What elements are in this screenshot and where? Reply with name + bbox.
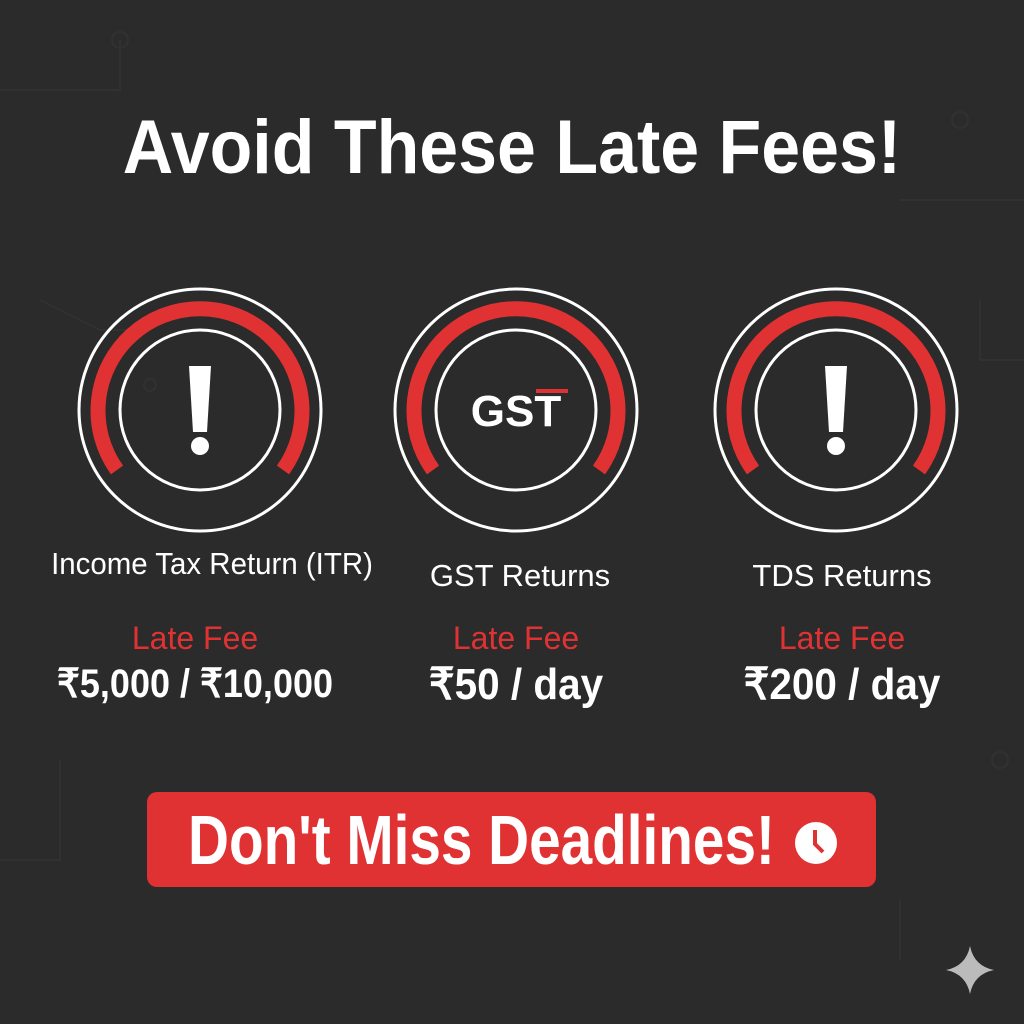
fee: GST bbox=[429, 620, 603, 709]
label: TDS: TDS Returns bbox=[752, 558, 932, 593]
fee: GST: ₹50 / day bbox=[429, 660, 603, 709]
icon: exclamation bbox=[189, 366, 211, 455]
title: Avoid These Late Fees! bbox=[123, 105, 901, 190]
icon: clock bbox=[795, 822, 837, 864]
gauge: GST bbox=[395, 289, 637, 531]
fee: TDS bbox=[744, 620, 940, 709]
label: ITR: Income Tax Return (ITR) bbox=[51, 546, 373, 581]
fee: ITR: ₹5,000 / ₹10,000 bbox=[57, 662, 333, 706]
button: don't miss deadlines bbox=[147, 792, 876, 887]
fee: TDS: ₹200 / day bbox=[744, 660, 940, 709]
label: GST: GST Returns bbox=[430, 558, 610, 593]
fee: TDS: Late Fee bbox=[779, 620, 905, 656]
button: don't miss deadlines: Don't Miss Deadlines! bbox=[188, 801, 775, 879]
icon: GST text: GST bbox=[471, 387, 561, 436]
fee: ITR: Late Fee bbox=[132, 620, 258, 656]
gauge: TDS bbox=[715, 289, 957, 531]
icon: exclamation bbox=[825, 366, 847, 455]
gauge: ITR bbox=[79, 289, 321, 531]
fee: GST: Late Fee bbox=[453, 620, 579, 656]
fee: ITR bbox=[57, 620, 333, 706]
icon: sparkle bbox=[946, 946, 994, 994]
